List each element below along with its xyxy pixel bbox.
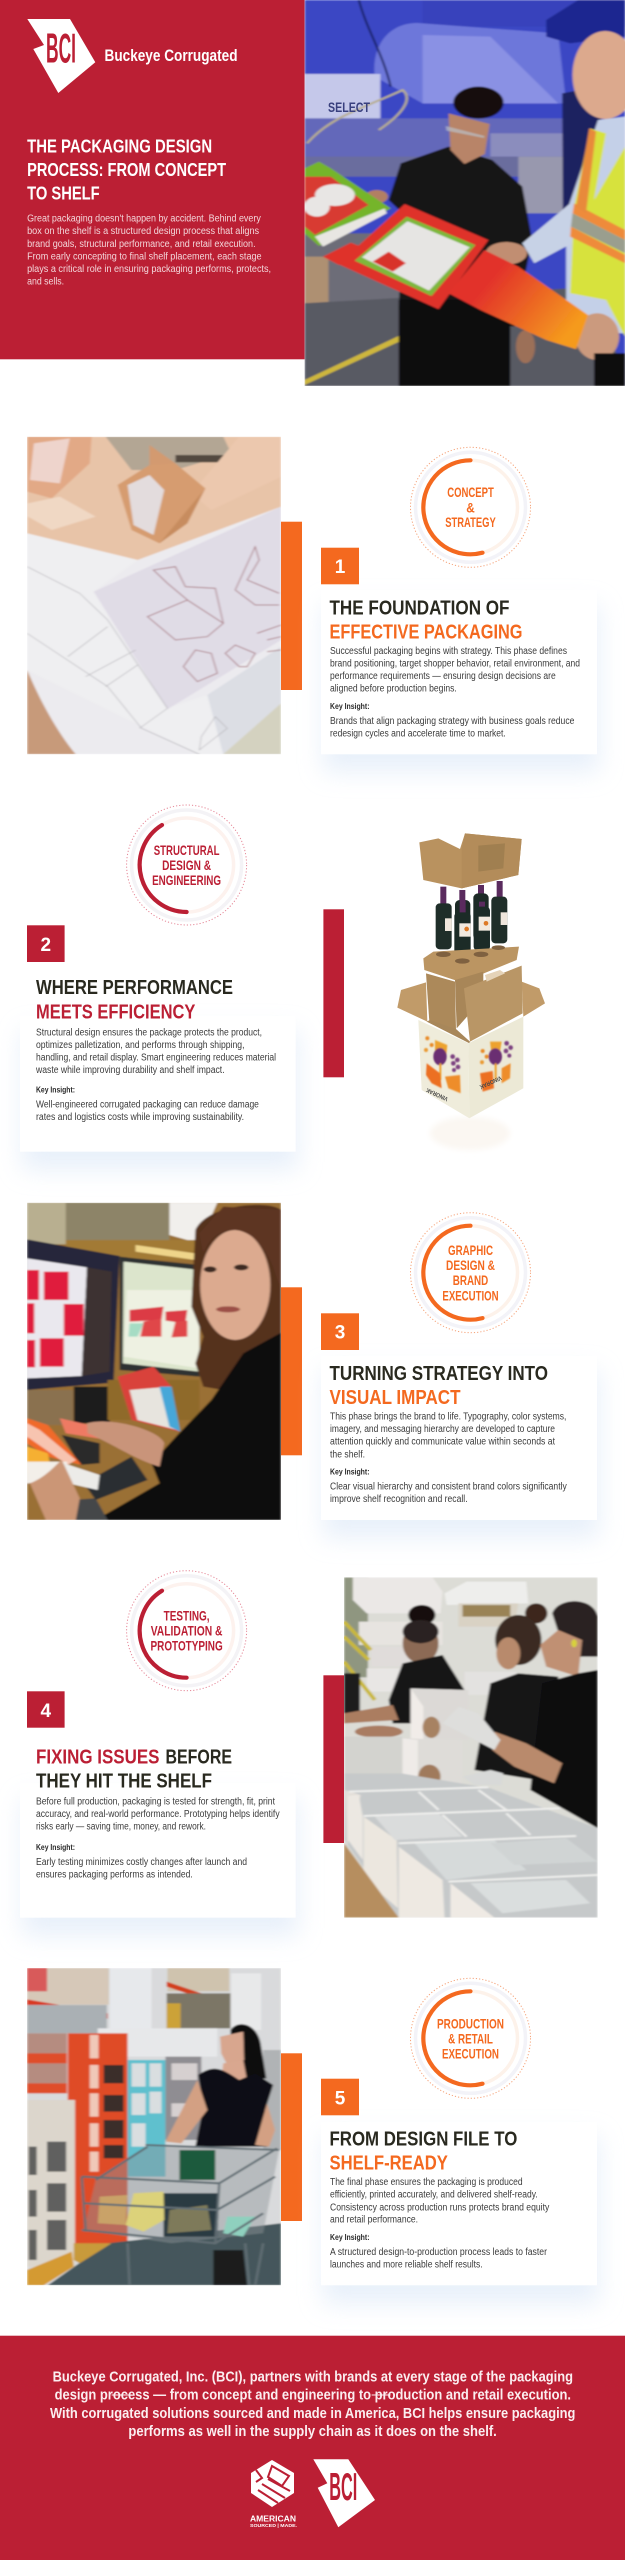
worker middle — [474, 1603, 558, 1783]
body text: handling, and retail display. Smart engineering reduces material — [36, 1053, 276, 1064]
body text: Structural design ensures the package protects the product, — [36, 1027, 262, 1038]
intro text: Great packaging doesn't happen by accident. Behind every — [27, 214, 261, 224]
phase circle: DESIGN & — [162, 857, 211, 873]
phase circle: STRUCTURAL — [154, 842, 220, 858]
box body: VINORAK — [478, 1074, 502, 1090]
brand mark on machine: SELECT — [328, 99, 370, 115]
text card — [20, 805, 298, 1170]
heading — [36, 1745, 232, 1793]
body text: Brands that align packaging strategy with business goals reduce — [330, 716, 575, 727]
number badge — [321, 548, 359, 584]
body text: Early testing minimizes costly changes after launch and — [36, 1857, 247, 1868]
body text: Well-engineered corrugated packaging can reduce damage — [36, 1099, 259, 1110]
sweater — [96, 1333, 281, 1520]
heading: THE FOUNDATION OF — [330, 596, 510, 619]
closing statement: performs as well in the supply chain as it does on the shelf. — [128, 2423, 497, 2440]
packed trays — [344, 1737, 598, 1918]
heading: FROM DESIGN FILE TO — [330, 2127, 517, 2150]
body text: accuracy, and real-world performance. Prototyping helps identify — [36, 1809, 280, 1820]
flat printed carton — [304, 162, 588, 349]
intro text: and sells. — [27, 277, 64, 288]
body text: risks early — saving time, money, and rework. — [36, 1822, 206, 1833]
body text: brand positioning, target shopper behavior, retail environment, and — [330, 658, 580, 669]
heading: FIXING ISSUES — [36, 1745, 160, 1768]
body text: Key Insight: — [330, 1467, 370, 1477]
body text: imagery, and messaging hierarchy are developed to capture — [330, 1424, 555, 1435]
shopper — [165, 2024, 275, 2285]
inner tray — [423, 945, 519, 982]
heading: MEETS EFFICIENCY — [36, 1000, 196, 1023]
body text: Key Insight: — [330, 2232, 370, 2242]
heading: BEFORE — [166, 1745, 232, 1768]
phase circle: GRAPHIC — [448, 1242, 493, 1258]
keyboard and hands — [27, 1418, 164, 1520]
section 1: concept and strategy — [27, 437, 599, 772]
phase circle: DESIGN & — [446, 1257, 495, 1273]
inner panels and flaps — [397, 966, 545, 1043]
body text: and retail performance. — [330, 2215, 418, 2226]
number badge — [27, 925, 65, 962]
phase circle: EXECUTION — [442, 1287, 499, 1303]
body text: ensures packaging performs as intended. — [36, 1870, 193, 1881]
body text: waste while improving durability and shelf impact. — [35, 1065, 225, 1076]
photo: designer at monitors with color swatches — [27, 1203, 281, 1520]
logo: American Sourced and Made: SOURCED | MADE. — [250, 2523, 297, 2528]
phase circle — [410, 447, 530, 567]
accent bar — [281, 1287, 302, 1455]
phase circle: ENGINEERING — [152, 872, 221, 888]
number badge: 3 — [335, 1322, 345, 1344]
intro text: From early concepting to final shelf placement, each stage — [27, 251, 262, 262]
body text: The final phase ensures the packaging is produced — [330, 2177, 523, 2188]
intro text: plays a critical role in ensuring packaging performs, protects, — [27, 264, 271, 275]
body text — [330, 1412, 567, 1505]
heading: SHELF-READY — [330, 2151, 448, 2174]
accent bar — [281, 522, 302, 690]
number badge — [321, 2079, 359, 2115]
body text: launches and more reliable shelf results. — [330, 2260, 483, 2271]
body text: rates and logistics costs while improving sustainability. — [36, 1112, 244, 1123]
body text — [35, 1027, 276, 1123]
title: PROCESS: FROM CONCEPT — [27, 160, 226, 180]
body text: Before full production, packaging is tested for strength, fit, print — [36, 1797, 275, 1808]
number badge: 1 — [335, 557, 346, 578]
section 3: graphic design and brand execution — [27, 1203, 599, 1538]
photo: paper box prototypes and sketches — [27, 437, 281, 754]
phase circle: PROTOTYPING — [151, 1638, 223, 1654]
section 2: structural design and engineering — [20, 805, 545, 1170]
box body — [418, 1017, 523, 1118]
body text: redesign cycles and accelerate time to market. — [330, 728, 506, 739]
body text: improve shelf recognition and recall. — [330, 1494, 468, 1505]
body text: Key Insight: — [330, 701, 370, 711]
number badge: 5 — [335, 2088, 346, 2110]
body text — [36, 1797, 280, 1881]
hair and face — [191, 1205, 281, 1390]
heading: WHERE PERFORMANCE — [36, 976, 233, 999]
title: THE PACKAGING DESIGN — [27, 137, 212, 157]
accent bar — [281, 2053, 302, 2221]
text card — [321, 1978, 599, 2304]
wine bottles — [436, 881, 507, 956]
accent bar — [323, 1675, 344, 1843]
heading — [330, 2127, 517, 2174]
phase circle: CONCEPT — [447, 484, 494, 500]
photo: shopper with cart in warehouse store — [27, 1968, 281, 2285]
heading: EFFECTIVE PACKAGING — [330, 620, 522, 643]
body text: attention quickly and communicate value within seconds at — [330, 1437, 555, 1448]
photo: workers packing boxes on a line — [344, 1577, 598, 1918]
body text: Successful packaging begins with strategy. This phase defines — [330, 646, 567, 657]
phase circle: VALIDATION & — [151, 1623, 222, 1639]
second worker with hi-vis vest — [486, 31, 625, 386]
logo: BCI: BCI — [329, 2466, 357, 2509]
heading — [330, 596, 522, 643]
logo: BCI — [313, 2459, 375, 2527]
logo: American Sourced and Made — [250, 2460, 297, 2528]
phase circle: STRATEGY — [445, 514, 496, 530]
heading: TURNING STRATEGY INTO — [330, 1362, 548, 1385]
phase circle: & — [466, 499, 475, 515]
illustration: exploded wine shipping box — [397, 833, 545, 1150]
intro text: box on the shelf is a structured design process that aligns — [27, 226, 259, 237]
phase circle: TESTING, — [164, 1608, 210, 1624]
panel: header — [0, 0, 625, 386]
text card — [20, 1571, 298, 1936]
heading — [330, 1362, 548, 1409]
heading: VISUAL IMPACT — [330, 1386, 461, 1409]
number badge: 4 — [41, 1701, 52, 1722]
logo: American Sourced and Made: AMERICAN — [250, 2514, 296, 2524]
number badge: 2 — [41, 935, 51, 956]
body text: aligned before production begins. — [330, 684, 457, 695]
carton lid — [419, 833, 522, 888]
heading: THEY HIT THE SHELF — [36, 1770, 212, 1793]
body text: performance requirements — ensuring design decisions are — [330, 671, 556, 682]
phase circle: BRAND — [453, 1272, 488, 1288]
closing statement — [50, 2368, 575, 2440]
body text — [330, 2177, 549, 2271]
first worker — [366, 87, 535, 386]
logo: BCI: BCI — [46, 25, 76, 72]
body text: optimizes palletization, and performs through shipping, — [36, 1040, 244, 1051]
phase circle: EXECUTION — [442, 2045, 499, 2061]
body text: This phase brings the brand to life. Typography, color systems, — [330, 1412, 566, 1423]
intro text: brand goals, structural performance, and retail execution. — [27, 239, 256, 250]
phase circle — [127, 1571, 247, 1691]
phase circle — [410, 1213, 530, 1333]
shopping cart and goods — [82, 2145, 279, 2285]
panel: footer — [0, 2336, 625, 2560]
body text: efficiently, printed accurately, and delivered shelf-ready. — [330, 2190, 538, 2201]
photo: two workers inspecting a flat printed box — [304, 0, 625, 386]
heading — [36, 976, 233, 1023]
phase circle: PRODUCTION — [437, 2015, 504, 2031]
section 5: production and retail execution — [27, 1968, 599, 2304]
phase circle: & RETAIL — [448, 2030, 493, 2046]
text card — [321, 1213, 599, 1538]
brand name: Buckeye Corrugated — [104, 46, 238, 65]
body text: Consistency across production runs protects brand equity — [330, 2202, 549, 2213]
title: TO SHELF — [27, 183, 100, 203]
packaged sample — [118, 1367, 180, 1432]
number badge — [321, 1313, 359, 1350]
title — [27, 137, 226, 203]
body text: Key Insight: — [36, 1842, 75, 1852]
phase circle — [410, 1978, 530, 2098]
intro text — [27, 214, 271, 288]
body text: Clear visual hierarchy and consistent brand colors significantly — [330, 1481, 567, 1492]
body text: the shelf. — [330, 1449, 365, 1460]
worker far — [344, 1605, 464, 1738]
phase circle — [127, 805, 247, 925]
stacked cartons — [403, 1688, 503, 1789]
box body: VINORAK — [425, 1086, 449, 1101]
body text: Key Insight: — [36, 1084, 75, 1094]
text card — [321, 447, 599, 772]
worker near — [492, 1601, 598, 1828]
body text: A structured design-to-production process leads to faster — [330, 2247, 548, 2258]
accent bar — [323, 909, 344, 1077]
section 4: testing, validation and prototyping — [20, 1571, 598, 1936]
body text — [330, 646, 580, 739]
logo: BCI — [27, 19, 95, 93]
number badge — [27, 1691, 65, 1728]
